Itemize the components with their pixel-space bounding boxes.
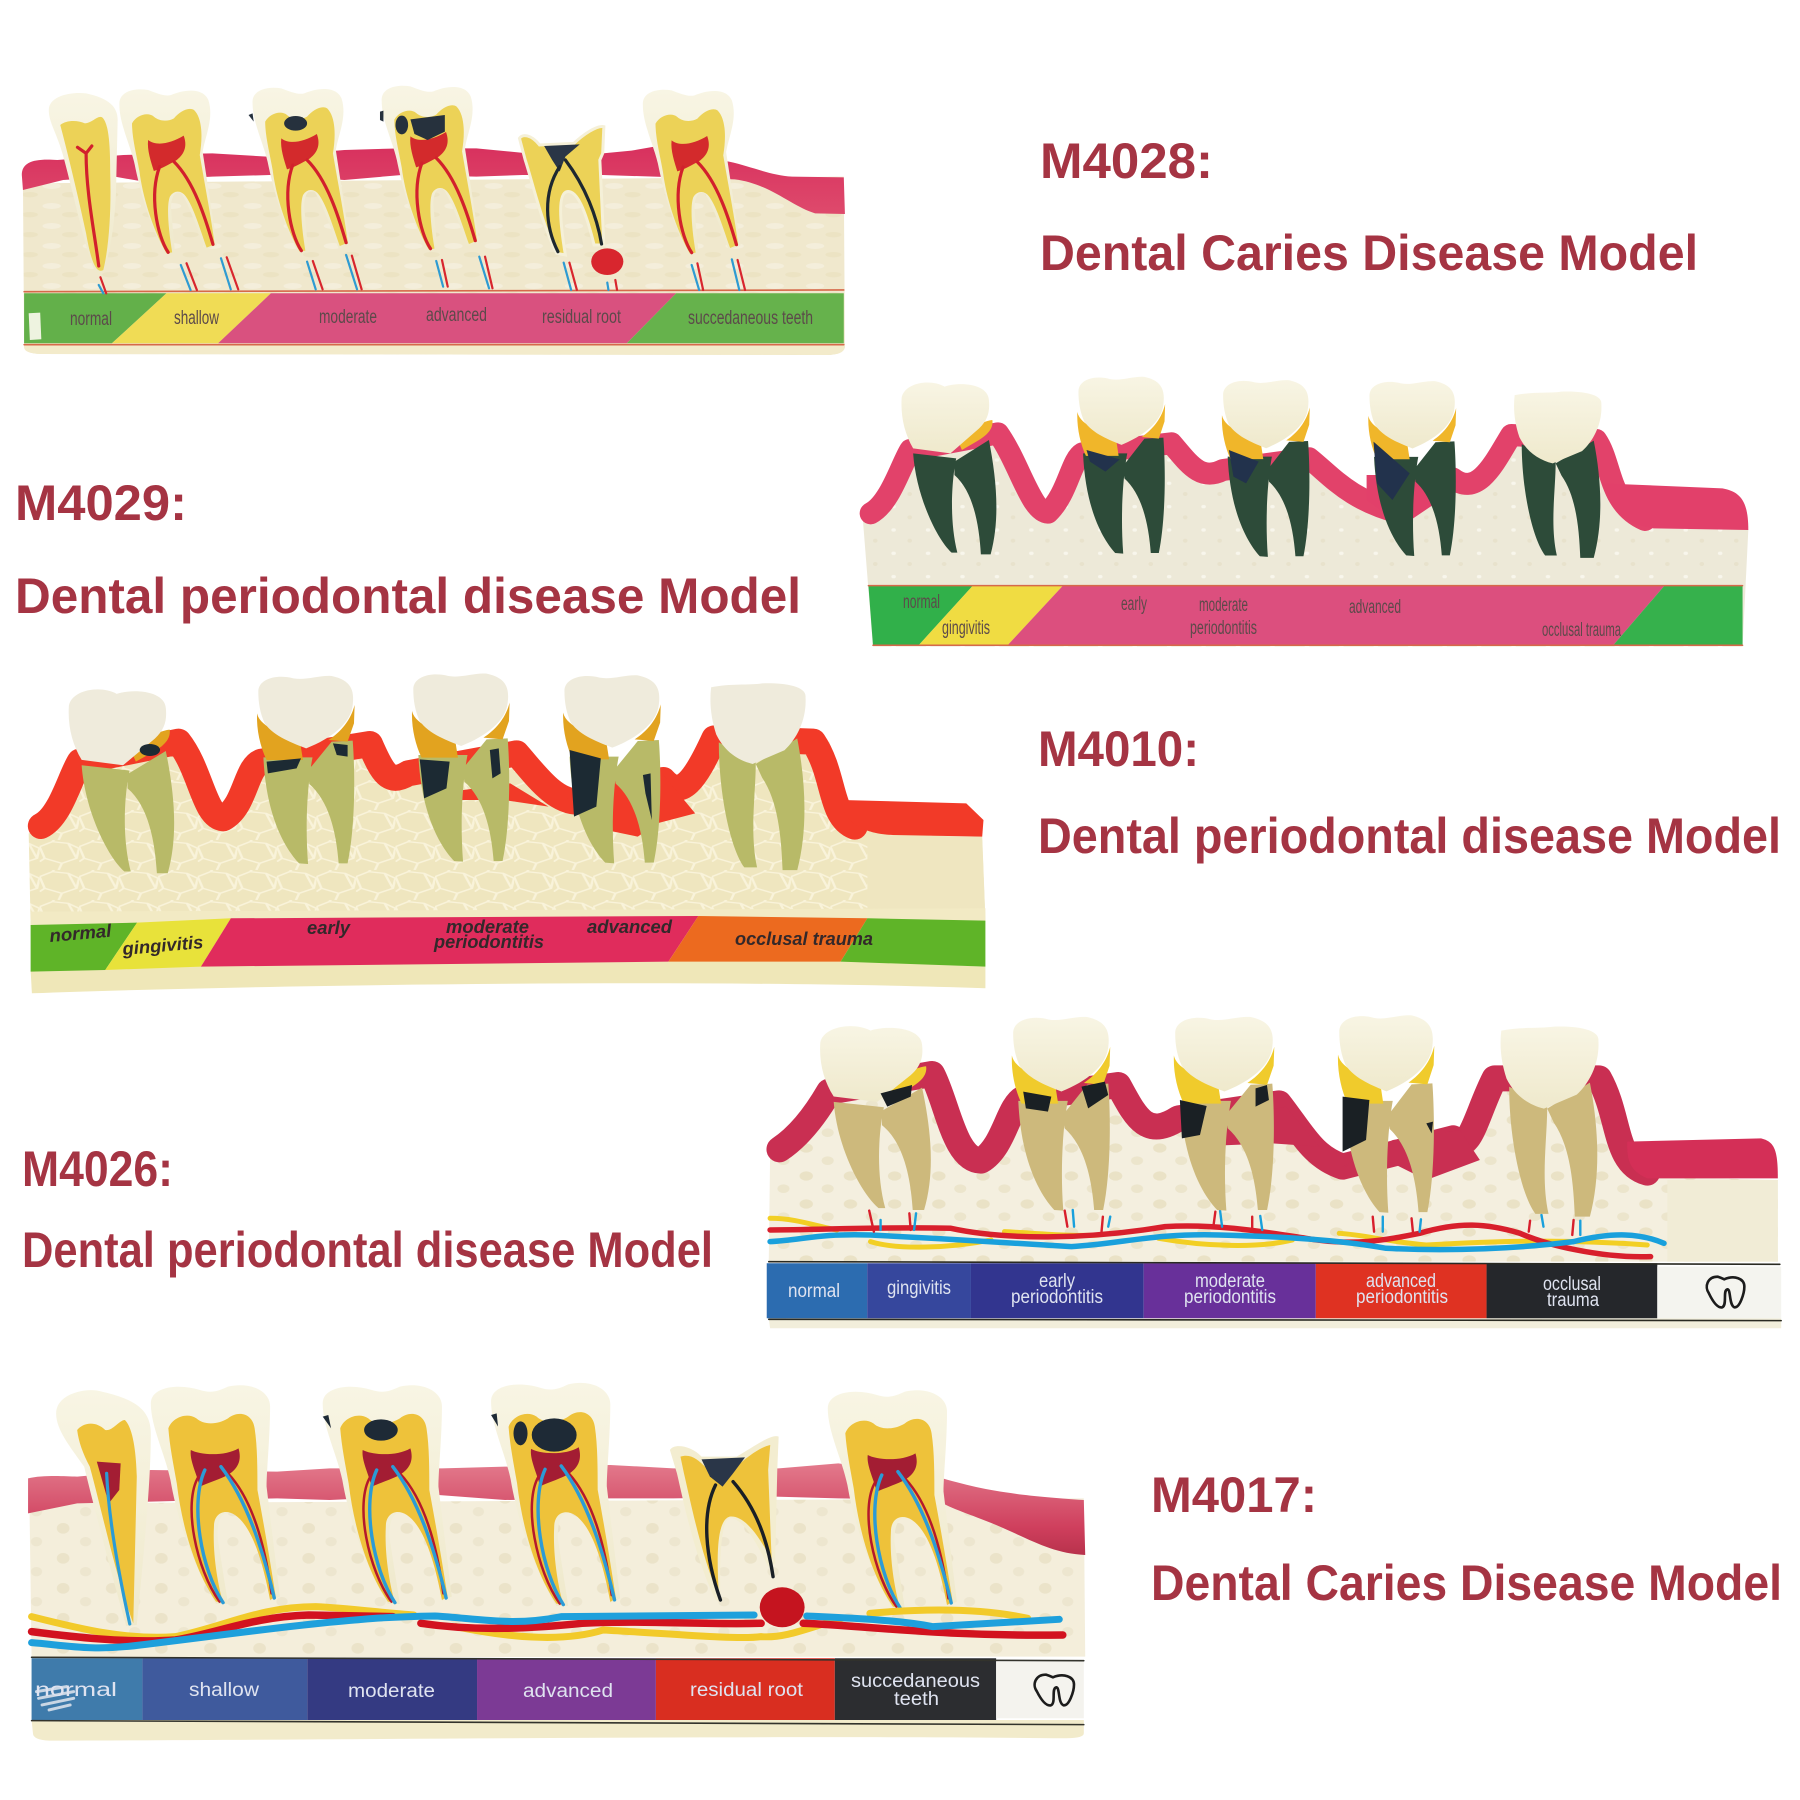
teeth row M4017 [56, 1383, 957, 1626]
heading: M4010 Dental periodontal disease Model: M4010: [1038, 721, 1199, 777]
panel: M4010 periodontal model [29, 674, 985, 993]
teeth row M4029 [901, 377, 1601, 558]
stage labels M4017: normal [35, 1680, 117, 1701]
stage labels M4028: normal [70, 309, 112, 330]
heading: M4028 Dental Caries Disease Model: Dental Caries Disease Model [1040, 225, 1698, 281]
stage labels M4010 [49, 917, 873, 959]
stage labels M4028 [70, 305, 813, 330]
stage labels M4010: periodontitis [433, 932, 544, 952]
stage labels M4028: residual root [542, 307, 622, 328]
vessels M4017 [32, 1587, 1063, 1648]
stage labels M4010: occlusal trauma [735, 929, 873, 949]
stage labels M4029: gingivitis [942, 618, 990, 639]
heading: M4029 Dental periodontal disease Model [15, 475, 801, 624]
stage labels M4029: normal [903, 592, 940, 613]
icon: tooth M4026 [1707, 1277, 1744, 1307]
model body M4029 [863, 430, 1748, 647]
panel: M4017 caries model [28, 1383, 1085, 1741]
panel: M4028 caries model [22, 86, 845, 355]
model body M4026 [767, 1072, 1781, 1328]
stage labels M4026: moderate [1195, 1271, 1265, 1292]
stage labels M4017: succedaneous [851, 1671, 980, 1692]
stage labels M4010: advanced [587, 917, 673, 937]
heading: M4017 Dental Caries Disease Model: M4017: [1151, 1467, 1317, 1523]
stage labels M4028: advanced [426, 305, 487, 326]
heading: M4026 Dental periodontal disease Model [22, 1141, 713, 1278]
stage labels M4017: residual root [690, 1680, 804, 1701]
heading: M4028 Dental Caries Disease Model: M4028: [1040, 133, 1213, 189]
stage labels M4010: moderate [446, 917, 529, 937]
heading: M4028 Dental Caries Disease Model [1040, 133, 1698, 281]
stage labels M4026: gingivitis [887, 1278, 951, 1299]
stage labels M4026: occlusal [1543, 1274, 1601, 1295]
stage labels M4026 [788, 1271, 1601, 1311]
stage labels M4028: moderate [319, 307, 377, 328]
teeth row M4026 [820, 1015, 1599, 1217]
stage labels M4026: early [1039, 1271, 1075, 1292]
model body M4028 [22, 147, 845, 355]
stage labels M4029: occlusal trauma [1542, 620, 1621, 641]
stage labels M4029: periodontitis [1190, 618, 1257, 639]
heading: M4010 Dental periodontal disease Model [1038, 721, 1781, 864]
teeth row M4028 [49, 86, 740, 275]
stage labels M4010: gingivitis [121, 932, 204, 959]
heading: M4029 Dental periodontal disease Model: Dental periodontal disease Model [15, 568, 801, 624]
icon: tooth M4017 [1035, 1675, 1074, 1705]
panel: M4026 periodontal model [767, 1015, 1781, 1328]
stage labels M4029: moderate [1199, 595, 1248, 616]
stage labels M4017: moderate [348, 1681, 435, 1702]
heading: M4017 Dental Caries Disease Model [1151, 1467, 1782, 1611]
heading: M4029 Dental periodontal disease Model: M4029: [15, 475, 187, 531]
stage labels M4010: early [307, 918, 351, 938]
stage labels M4026: trauma [1547, 1290, 1599, 1311]
stage labels M4026: advanced [1366, 1271, 1436, 1292]
stage labels M4026: periodontitis [1184, 1287, 1276, 1308]
panel: M4029 periodontal model [863, 377, 1748, 647]
heading: M4026 Dental periodontal disease Model: M4026: [22, 1141, 173, 1197]
stage labels M4026: periodontitis [1011, 1287, 1103, 1308]
teeth row M4010 [69, 674, 806, 873]
stage labels M4029: early [1121, 594, 1147, 615]
stage labels M4029 [903, 592, 1621, 641]
stage labels M4028: shallow [174, 308, 219, 329]
stage labels M4028: succedaneous teeth [688, 308, 813, 329]
stage labels M4029: advanced [1349, 597, 1401, 618]
stage labels M4010: normal [49, 921, 113, 946]
model body M4017 [28, 1463, 1085, 1741]
stage labels M4017: advanced [523, 1681, 613, 1702]
stage labels M4017: shallow [189, 1680, 259, 1701]
heading: M4026 Dental periodontal disease Model: Dental periodontal disease Model [22, 1222, 713, 1278]
stage labels M4017 [35, 1671, 980, 1710]
stage labels M4026: periodontitis [1356, 1287, 1448, 1308]
stage labels M4026: normal [788, 1281, 840, 1302]
model body M4010 [29, 735, 985, 993]
stage labels M4017: teeth [894, 1689, 939, 1710]
